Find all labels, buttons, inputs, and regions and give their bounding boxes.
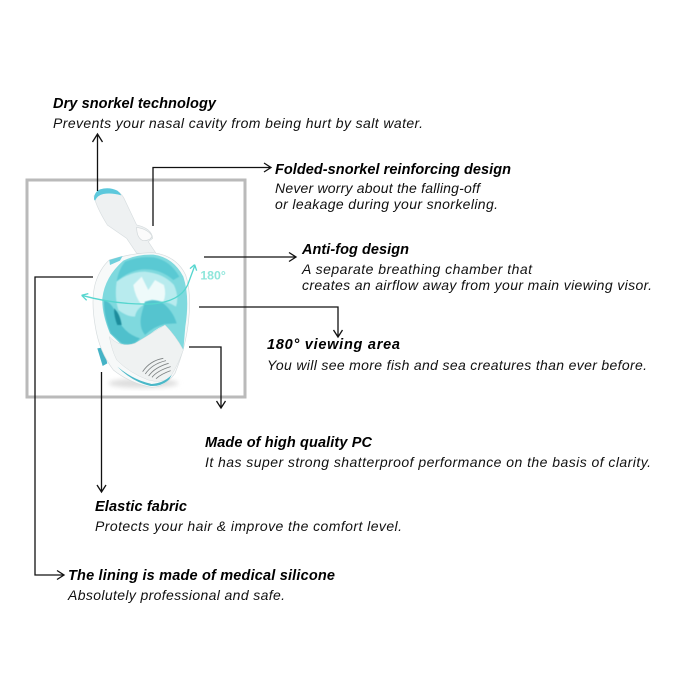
breathing vent xyxy=(143,358,171,379)
text block: anti-fog design: A separate breathing chamber that xyxy=(301,261,533,277)
text block: anti-fog design: creates an airflow away from your main viewing visor. xyxy=(302,277,652,293)
arrow: folded snorkel xyxy=(153,163,271,226)
text block: viewing area: You will see more fish and sea creatures than ever before. xyxy=(267,357,647,373)
text block: anti-fog design: Anti-fog design xyxy=(301,242,409,258)
label: 180 degrees: 180° xyxy=(200,269,226,283)
text block: high quality PC: It has super strong shatterproof performance on the basis of clarity. xyxy=(205,454,651,470)
arrow: 180 degree sweep xyxy=(82,265,197,304)
arrow: high quality PC xyxy=(189,347,226,408)
illustration: snorkel mask xyxy=(82,188,226,388)
mask shadow xyxy=(108,379,178,388)
mask white frame xyxy=(93,253,190,387)
text block: medical silicone lining: The lining is made of medical silicone xyxy=(68,568,335,584)
snorkel tube xyxy=(94,188,156,253)
arrow: medical silicone xyxy=(35,277,93,580)
text block: high quality PC xyxy=(205,435,651,470)
text block: medical silicone lining xyxy=(67,568,335,603)
text block: folded-snorkel design: Folded-snorkel reinforcing design xyxy=(275,162,511,178)
panel: product image frame xyxy=(27,180,245,397)
mask side strap xyxy=(97,347,107,366)
text block: medical silicone lining: Absolutely professional and safe. xyxy=(67,587,285,603)
mask strap tab xyxy=(109,256,123,265)
arrow: dry snorkel xyxy=(92,134,102,191)
text block: folded-snorkel design: Never worry about the falling-off xyxy=(275,180,482,196)
text block: anti-fog design xyxy=(301,242,652,293)
text block: high quality PC: Made of high quality PC xyxy=(205,435,373,451)
text block: elastic fabric: Protects your hair & improve the comfort level. xyxy=(95,518,402,534)
text block: folded-snorkel design xyxy=(275,162,511,212)
text block: dry snorkel technology: Prevents your nasal cavity from being hurt by salt water. xyxy=(53,115,423,131)
arrow: anti-fog xyxy=(204,252,296,262)
mask chin guard xyxy=(109,325,183,381)
arrow: elastic fabric xyxy=(97,372,106,492)
text block: dry snorkel technology: Dry snorkel technology xyxy=(53,96,217,112)
visor xyxy=(102,255,187,350)
text block: elastic fabric: Elastic fabric xyxy=(95,499,187,515)
text block: dry snorkel technology xyxy=(53,96,423,131)
text block: folded-snorkel design: or leakage during your snorkeling. xyxy=(275,196,498,212)
text block: elastic fabric xyxy=(95,499,402,534)
text block: viewing area xyxy=(267,337,647,373)
arrow: viewing area xyxy=(199,307,342,337)
text block: viewing area: 180° viewing area xyxy=(267,337,400,353)
